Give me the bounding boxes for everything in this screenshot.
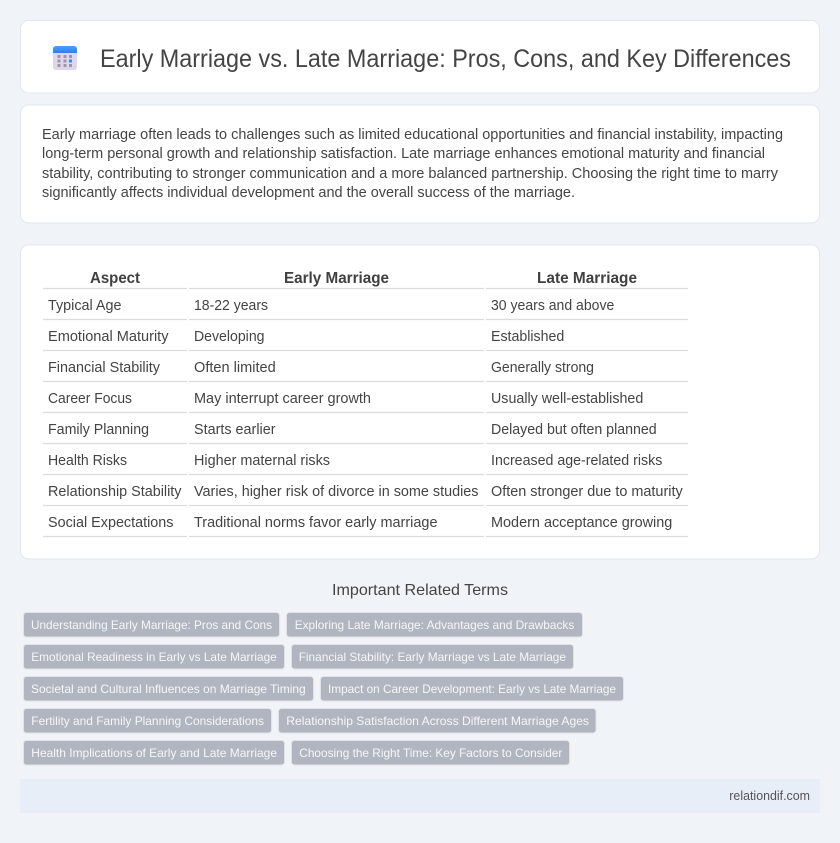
table row: career focus: May interrupt career growth xyxy=(194,391,371,407)
table row: career focus: Career Focus xyxy=(48,391,132,407)
tag: Relationship Satisfaction Across Different Marriage Ages xyxy=(286,714,589,728)
table row: emotional maturity: Developing xyxy=(194,329,264,345)
table row: family planning: Starts earlier xyxy=(194,422,276,438)
text block: introduction xyxy=(42,127,783,201)
table row: financial stability: Often limited xyxy=(194,360,276,376)
table row: social expectations: Social Expectations xyxy=(48,515,174,531)
tag xyxy=(292,740,570,765)
tag: Understanding Early Marriage: Pros and Cons xyxy=(31,618,272,632)
tag: Health Implications of Early and Late Marriage xyxy=(31,746,277,760)
table row: emotional maturity xyxy=(43,329,688,350)
footer source text: relationdif.com xyxy=(729,789,810,803)
tag: Societal and Cultural Influences on Marriage Timing xyxy=(31,682,306,696)
table row: health risks: Increased age-related risks xyxy=(491,453,662,469)
table row: relationship stability: Varies, higher risk of divorce in some studies xyxy=(194,484,479,500)
table row: health risks: Higher maternal risks xyxy=(194,453,330,469)
text block: introduction: Early marriage often leads to challenges such as limited educational opportunities and financial instability, impacting xyxy=(42,127,783,143)
table row: emotional maturity: Established xyxy=(491,329,564,345)
tag: Choosing the Right Time: Key Factors to Consider xyxy=(299,746,562,760)
tag xyxy=(24,708,272,733)
table row: emotional maturity: Emotional Maturity xyxy=(48,329,169,345)
table row: social expectations: Modern acceptance growing xyxy=(491,515,672,531)
table header: Aspect xyxy=(90,270,141,287)
table row: typical age: 30 years and above xyxy=(491,298,614,314)
table row: relationship stability xyxy=(43,484,688,506)
text block: introduction: long-term personal growth and relationship satisfaction. Late marriage enhances emotional maturity and financial xyxy=(42,146,765,162)
text block: introduction: stability, contributing to stronger communication and a more balanced partnership. Choosing the right time to marry xyxy=(42,166,779,182)
table row: financial stability: Financial Stability xyxy=(48,360,161,376)
table row: financial stability xyxy=(43,360,688,382)
panel: comparison table xyxy=(20,245,820,559)
table row: family planning xyxy=(43,422,688,444)
table row: typical age: 18-22 years xyxy=(194,298,268,314)
heading: important related terms: Important Related Terms xyxy=(332,582,508,599)
table row: relationship stability: Often stronger due to maturity xyxy=(491,484,684,500)
table row: financial stability: Generally strong xyxy=(491,360,594,376)
tag xyxy=(320,676,624,701)
table header: Late Marriage xyxy=(537,270,637,287)
related terms tags xyxy=(24,612,624,765)
tag xyxy=(24,676,314,701)
table row: relationship stability: Relationship Stability xyxy=(48,484,182,500)
table row: career focus: Usually well-established xyxy=(491,391,643,407)
table row: family planning: Family Planning xyxy=(48,422,149,438)
table header xyxy=(43,270,688,288)
panel: introduction xyxy=(20,105,820,223)
tag: Fertility and Family Planning Considerations xyxy=(31,714,264,728)
title: Early Marriage vs. Late Marriage: Pros, Cons, and Key Differences xyxy=(100,45,791,73)
table row: social expectations: Traditional norms favor early marriage xyxy=(194,515,438,531)
footer xyxy=(20,779,820,813)
tag xyxy=(24,644,284,669)
table row: career focus xyxy=(43,391,688,412)
table row: family planning: Delayed but often planned xyxy=(491,422,657,438)
tag: Emotional Readiness in Early vs Late Marriage xyxy=(31,650,277,664)
panel: header xyxy=(20,20,820,93)
tag: Financial Stability: Early Marriage vs Late Marriage xyxy=(299,650,566,664)
tag: Impact on Career Development: Early vs Late Marriage xyxy=(328,682,616,696)
table row: typical age xyxy=(43,298,688,320)
table row: health risks xyxy=(43,453,688,474)
table row: typical age: Typical Age xyxy=(48,298,122,314)
text block: introduction: significantly affects individual development and the overall success of the marriage. xyxy=(42,185,575,201)
table header: Early Marriage xyxy=(284,270,389,287)
tag xyxy=(24,740,284,765)
tag xyxy=(278,708,596,733)
table row: social expectations xyxy=(43,515,688,536)
icon: calendar xyxy=(53,46,77,70)
tag: Exploring Late Marriage: Advantages and Drawbacks xyxy=(295,618,574,632)
tag xyxy=(286,612,582,637)
tag xyxy=(292,644,574,669)
tag xyxy=(24,612,280,637)
table row: health risks: Health Risks xyxy=(48,453,127,469)
